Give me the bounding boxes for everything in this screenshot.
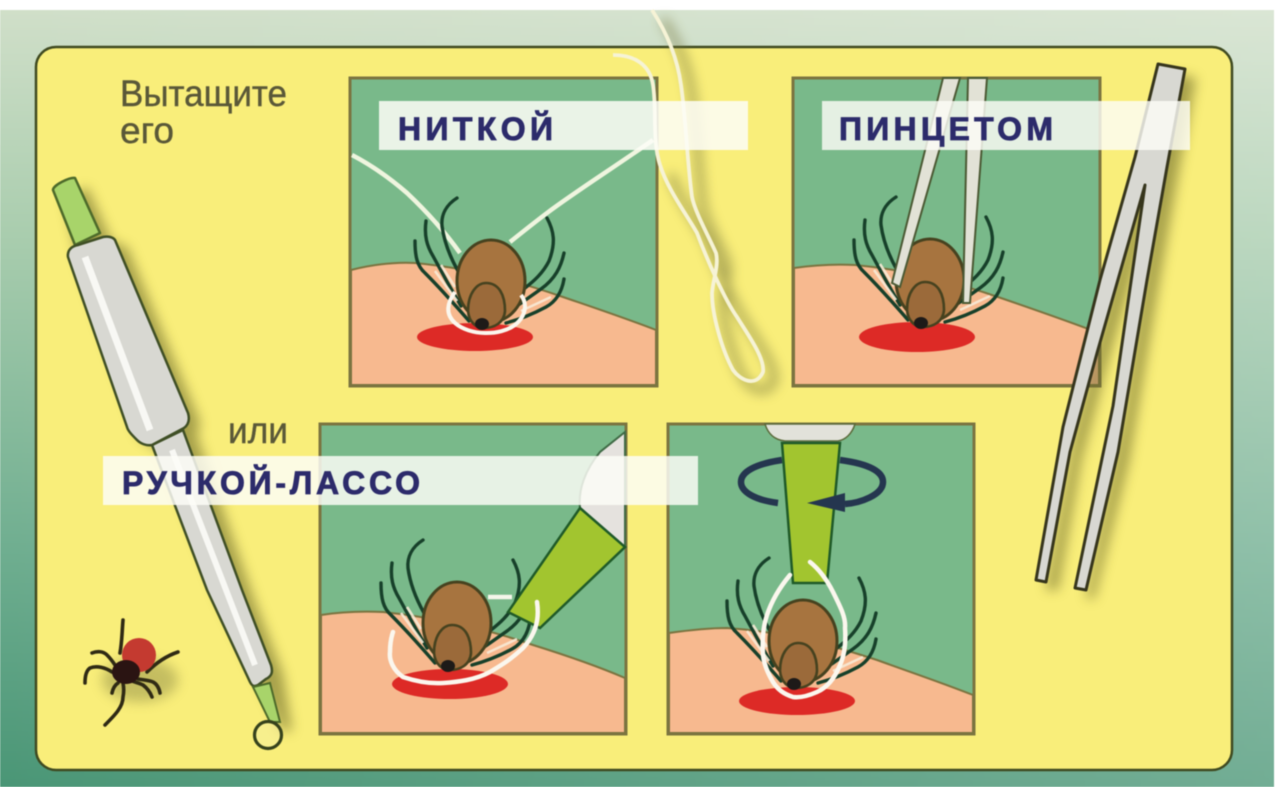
blood spot [739,687,855,715]
skin [669,628,973,733]
thread [613,10,774,390]
tick [381,540,530,672]
panel: lasso rotation [668,424,974,734]
rotation ring [741,460,883,504]
label: thread: НИТКОЙ [398,111,553,147]
thread strands [352,140,653,253]
small tick illustration [85,620,178,725]
pen green tip [253,683,280,722]
heading [120,73,287,151]
tick [727,558,876,690]
pen collar [765,424,855,441]
pen lower barrel [152,430,272,686]
text: or: или [228,410,288,451]
heading: Вытащите [120,73,287,114]
label: lasso pen [103,456,698,505]
pen lasso ring [254,722,282,748]
lasso pen body [580,432,625,547]
thread loop [448,292,525,333]
label: thread [379,101,748,150]
panel: tweezers method [793,78,1100,386]
skin [351,263,656,385]
heading: его [120,110,174,151]
tick [854,197,1003,329]
skin [321,612,625,733]
panel: lasso side view [320,424,626,734]
lasso loop [763,562,845,697]
skin [794,265,1099,385]
lasso pen tip [508,508,625,628]
pen tip [782,443,840,583]
blood spot [417,323,533,351]
lasso strand [390,602,538,683]
pen upper barrel [68,237,189,445]
lasso back strand [488,595,512,599]
tweezer tips [892,78,987,303]
tick [415,198,564,330]
blood spot [392,669,508,699]
pen green cap [53,178,100,245]
label: lasso pen: РУЧКОЙ-ЛАССО [122,465,420,501]
tweezers [1036,64,1196,599]
blood spot [859,322,975,352]
rotation arrow [807,493,845,512]
label: tweezers: ПИНЦЕТОМ [839,111,1053,147]
panel: thread method [350,78,657,386]
lasso pen [53,178,292,748]
label: tweezers [822,101,1190,150]
